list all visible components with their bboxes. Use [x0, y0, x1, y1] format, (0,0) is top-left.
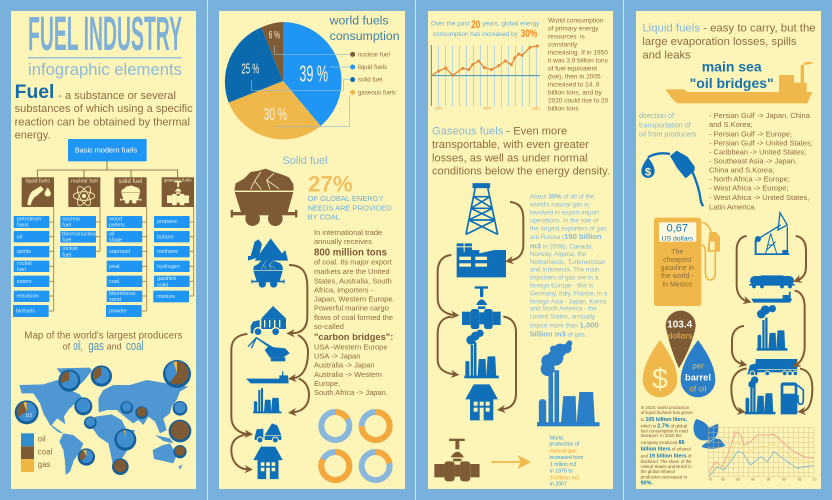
card: cheapest gasoline: 0,67 [667, 223, 688, 235]
panel: energy growth and gaseous fuels [428, 11, 613, 489]
oil routes list: - West Africa -> Europe; [709, 184, 789, 193]
oil flow arrows [731, 236, 812, 411]
list: gaseous fuels: methane [157, 249, 178, 255]
line chart: energy consumption: 1995 [435, 107, 442, 111]
category: liquid fuels: liquid fuels [25, 178, 50, 184]
text: FUEL INDUSTRY [28, 8, 182, 61]
oil routes list: - Caribbean -> United States; [709, 147, 806, 156]
natural gas production text: natural gas [549, 449, 577, 455]
natural gas trade text: involved in export-import [530, 210, 599, 217]
icon: tanker [751, 292, 792, 303]
gaps between panels [208, 0, 624, 500]
natural gas trade text: m3 in 2008), Canada, [530, 242, 593, 251]
line chart: biofuel production: '00 [782, 477, 786, 481]
icon: blue barrel drop [681, 340, 715, 397]
price label [667, 320, 693, 341]
icon: house [465, 384, 498, 420]
natural gas trade text: foreign Europe - this is [530, 282, 593, 289]
oil routes list: Latin America. [709, 202, 756, 211]
card: cheapest gasoline [654, 218, 720, 306]
world consumption text: increasing. If in 1950 [548, 50, 608, 57]
world consumption text: of primary energy [548, 26, 599, 33]
price label: 103.4 [667, 320, 693, 331]
coal trade text: annually receives [314, 237, 372, 246]
liquid fuels heading: Liquid fuels - easy to carry, but the [642, 22, 816, 34]
list: solid fuels: shale [109, 238, 122, 244]
biofuels text: biodiesel. The share of the [641, 459, 692, 464]
coal trade text: Australia -> Japan [314, 361, 375, 370]
map heading: Map of the world's largest producers [24, 330, 182, 341]
icon: gas pump [781, 382, 803, 414]
fuel definition text: - a substance or several [58, 90, 176, 102]
oil supply chain icons [749, 213, 795, 351]
world consumption text: it was 3.9 billion tons [548, 58, 609, 65]
oil routes list: - Persian Gulf -> Europe; [709, 129, 792, 138]
natural gas trade text: Norway, Algeria, the [530, 251, 587, 258]
natural gas trade text: are Russia (190 billion [530, 232, 602, 241]
natural gas trade text: and North America - the [530, 306, 597, 313]
line chart: biofuel production: '70 [708, 477, 712, 481]
world consumption text: World consumption [548, 18, 604, 25]
chart heading [431, 19, 540, 40]
biofuels text: transport. In 2010 the [641, 433, 682, 438]
panel: fuel overview [11, 8, 196, 489]
category: gaseous fuels [162, 177, 194, 207]
list: liquid fuels: emulsion [17, 294, 39, 300]
list: liquid fuels: rocket [17, 261, 32, 267]
list: solid fuels: pellets [109, 223, 125, 229]
world consumption text: 2020 could rise to 20 [548, 98, 609, 105]
list: nuclear fuels: rocket [62, 246, 78, 252]
natural gas trade text: and Indonesia. The main [530, 267, 600, 274]
coal trade text: flows of coal formed the [314, 313, 393, 322]
category: gaseous fuels: gaseous fuels [164, 178, 192, 183]
direction label [639, 112, 697, 138]
line chart: energy consumption: 2015 [532, 107, 540, 111]
coal trade text: States, Australia, South [314, 276, 392, 285]
list: nuclear fuels: fuel [62, 252, 71, 258]
direction label: oil from producers [639, 130, 697, 138]
coal trade text: Powerful marine cargo [314, 304, 389, 313]
producer bubbles: 112 [25, 413, 33, 418]
panel 4 background [636, 11, 821, 489]
fuel definition text: energy. [15, 130, 50, 142]
coal statistic: BY COAL [308, 212, 340, 221]
icon: large power plant [537, 340, 600, 426]
oil routes list: - North Africa -> Europe; [709, 174, 790, 183]
icon: tank wagon [749, 275, 795, 288]
liquid fuels heading: and leaks [642, 50, 691, 62]
root box: Basic modern fuels [75, 145, 137, 154]
price label: dollars [668, 331, 692, 341]
natural gas production text: World [549, 435, 563, 441]
world consumption text: (toe), then in 2005 [548, 74, 601, 81]
gaseous fuels heading [432, 125, 610, 178]
coal statistic: NEEDS ARE PROVIDED [308, 203, 392, 212]
map heading: oil, [73, 339, 83, 353]
icon: pipeline valve [462, 286, 501, 329]
icon: pumpjack [755, 213, 789, 255]
natural gas trade text: foreign Asia - Japan, Korea [530, 298, 607, 305]
map legend: coal [38, 448, 53, 457]
panel: liquid fuels [636, 11, 821, 489]
icon: house [253, 447, 283, 479]
world consumption text [548, 18, 609, 113]
world consumption text: increased to 14, 8 [548, 82, 600, 89]
map legend: oil [38, 435, 46, 444]
coal trade text: USA -Western Europe [314, 342, 387, 351]
root box [68, 139, 147, 161]
icon: yellow dollar drop: $ [652, 363, 668, 395]
world consumption text: billion tons [548, 106, 579, 113]
fuel definition text: Fuel [15, 82, 54, 103]
pie legend: solid fuel [358, 76, 382, 83]
list: solid fuels: sapropel [109, 249, 130, 255]
biofuels text: of liquid biofuels has grown [641, 410, 693, 415]
pie legend: nuclear fuel [358, 51, 390, 58]
oil bridges heading: main sea [702, 59, 762, 75]
list: liquid fuels [13, 216, 49, 317]
list: solid fuels: bituminous [109, 291, 136, 297]
oil bridges heading [690, 59, 774, 91]
biofuels text: In 2010, world production [641, 405, 690, 410]
oil price drops [643, 311, 715, 397]
icon: mine [248, 238, 288, 261]
natural gas production text: 3 trillion m3 [550, 475, 579, 481]
map heading: of [63, 341, 71, 351]
line chart: biofuel production: '80 [721, 477, 725, 481]
pie legend: gaseous fuels [358, 89, 396, 96]
chart heading: consumption has increased by [433, 31, 518, 38]
map heading [24, 330, 182, 353]
pie chart: world fuels consumption: 6 % [269, 30, 280, 42]
icon: gas derrick [466, 184, 498, 234]
liquid fuels heading [642, 22, 816, 62]
world consumption text: of fuel equivalent [548, 66, 597, 73]
category: nuclear fuel [68, 177, 100, 207]
natural gas production text: in 1970 to [550, 468, 573, 474]
line chart: biofuel production: '10 [812, 477, 817, 481]
coal trade text: In international trade [314, 228, 382, 237]
list: liquid fuels: spirits [17, 249, 31, 255]
natural gas production text: production of [549, 442, 580, 448]
chart title: consumption [330, 29, 400, 43]
chart heading: years, global energy [482, 21, 540, 28]
card: cheapest gasoline: the world - [661, 273, 694, 280]
panel 1 background [11, 11, 196, 489]
biofuels text: to 105 billion liters, [641, 417, 688, 423]
gas flow arrows [438, 202, 523, 409]
map heading: gas [88, 339, 104, 353]
coal flow arrows [231, 265, 309, 469]
chart heading: 20 [471, 19, 480, 31]
map heading: coal [126, 339, 144, 353]
category: solid fuel [114, 177, 147, 207]
coal statistic [308, 172, 392, 221]
fuel definition text: substances of which using a specific [15, 103, 193, 115]
list: liquid fuels: biofuels [16, 309, 35, 315]
coal statistic: 27% [308, 172, 353, 197]
fuel definition text: reaction can be obtained by thermal [15, 116, 190, 128]
direction label: transportation of [639, 121, 691, 129]
panel 2 background [219, 11, 405, 489]
heading: solid fuel: Solid fuel [282, 155, 328, 167]
liquid fuels heading: large evaporation losses, spills [642, 36, 797, 48]
biofuels text: billion liters of ethanol [641, 447, 691, 453]
oil routes list: - Southeast Asia -> Japan, [709, 157, 797, 166]
biofuels text: and 19 billion liters of [641, 453, 692, 459]
coal statistic: OF GLOBAL ENERGY [308, 194, 384, 203]
coal trade text: Australia -> Western [314, 370, 382, 379]
natural gas trade text: operations. In the role of [530, 217, 598, 224]
line chart: energy consumption: 2004 [483, 107, 491, 111]
line chart: biofuel production: '85 [736, 477, 740, 481]
oil routes list: - West Africa -> United States, [709, 193, 809, 202]
line chart: biofuel production: '95 [766, 477, 771, 481]
list: gaseous fuels: hydrogen [157, 264, 180, 270]
icon: factory [745, 376, 775, 414]
biofuels text: United States and Brazil in [641, 464, 692, 469]
oil bridges heading: "oil bridges" [690, 75, 774, 91]
coal trade text: Africa, importers - [314, 285, 374, 294]
biofuels text: the global ethanol [641, 469, 675, 474]
coal trade text [314, 228, 395, 397]
list: nuclear fuels: fuel [62, 238, 71, 244]
coal trade text: Japan, Western Europe. [314, 295, 395, 304]
line chart: biofuel production: '05 [797, 477, 802, 481]
biofuels text [641, 405, 693, 487]
icon: coal cart [231, 169, 297, 226]
delivery icons [745, 359, 803, 414]
world map [15, 360, 191, 475]
list: gaseous fuels: mixture [157, 294, 175, 300]
list: solid fuels: peat [109, 264, 120, 270]
natural gas trade text: United States, annually [530, 314, 596, 321]
gaseous fuels heading: transportable, with even greater [432, 139, 589, 151]
natural gas trade text: importers of gas are in a [530, 275, 599, 282]
list: nuclear fuels [60, 216, 97, 258]
pie chart: world fuels consumption: 30 % [264, 104, 287, 124]
gaseous fuels heading: losses, as well as under normal [432, 152, 588, 164]
world consumption text: constantly [548, 42, 578, 49]
icon: power plant with smoke [464, 330, 499, 378]
gas supply chain icons [457, 184, 506, 420]
list: gaseous fuels: solid [157, 282, 168, 288]
category: liquid fuels [22, 177, 54, 207]
natural gas trade text: About 30% of all of the [530, 194, 595, 201]
list: solid fuels: coal [109, 279, 119, 285]
coal trade text: Europe, [314, 379, 340, 388]
icon: power plant [253, 388, 282, 413]
natural gas trade text [529, 194, 608, 339]
coal trade text: markets are the United [314, 267, 390, 276]
list: liquid fuels: petroleum [17, 216, 42, 222]
coal trade text: USA -> Japan [314, 352, 360, 361]
pie chart: world fuels consumption: 25 % [241, 61, 259, 77]
producer bubbles [15, 360, 191, 475]
coal trade text: so-called [314, 322, 344, 331]
coal trade text: of coal. Its major export [314, 258, 393, 267]
list: liquid fuels: fuels [17, 223, 29, 229]
coal supply chain icons [246, 238, 290, 479]
list: gaseous fuels: propane [157, 219, 177, 225]
natural gas production text: in 2007 [550, 482, 567, 488]
pie legend [350, 51, 396, 96]
icon: refinery [757, 305, 787, 351]
icon: gas plant [457, 243, 506, 277]
icon: fuel truck [747, 359, 798, 376]
card: cheapest gasoline: US dollars [662, 236, 694, 243]
category: solid fuel: solid fuel [119, 179, 142, 185]
icon: fuel nozzle and dollar drop: $ [645, 166, 652, 178]
panel 3 background [428, 11, 613, 489]
natural gas production text [549, 435, 583, 488]
list: nuclear fuels: fuel [62, 223, 71, 229]
map legend [21, 433, 53, 472]
map heading: and [107, 341, 122, 351]
icon: blue barrel drop: barrel [685, 373, 711, 383]
biofuels text: which is 2.7% of global [641, 423, 687, 429]
list: gaseous fuels [153, 216, 190, 302]
biofuels text: production decreased to [641, 474, 688, 479]
icon: fuel nozzle and dollar drop [641, 151, 703, 206]
list: gaseous fuels: gasified [157, 276, 176, 282]
icon: truck [255, 423, 281, 443]
subtitle: infographic elements [28, 61, 182, 79]
list: liquid fuels: esters [17, 279, 32, 285]
chart heading: Over the past [431, 21, 470, 28]
pie chart: world fuels consumption [225, 22, 350, 139]
icon: excavator [248, 338, 290, 361]
pie chart: world fuels consumption: 39 % [299, 61, 328, 87]
list: nuclear fuels: nuclear [62, 216, 80, 222]
chart title: world fuels [329, 13, 389, 27]
chart title [329, 13, 400, 43]
list: nuclear fuels: thermonuclear [62, 232, 97, 238]
card: cheapest gasoline: cheapest [663, 257, 692, 264]
icon: leaves [693, 419, 726, 449]
pie legend: liquid fuels [358, 64, 387, 71]
list: solid fuels: oil [109, 232, 114, 238]
oil routes list: and S.Korea; [709, 120, 753, 129]
fuel definition text [15, 82, 193, 142]
natural gas trade text: billion m3 of gas. [530, 330, 587, 339]
coal trade text: 800 million tons [314, 248, 387, 259]
oil routes list: - Persian Gulf -> United States; [709, 138, 813, 147]
biofuels text: company produced 86 [641, 440, 685, 446]
natural gas trade text: Germany, Italy, France, in a [530, 290, 608, 297]
oil routes list: - Persian Gulf -> Japan, China [709, 111, 811, 120]
list: solid fuels: powder [109, 308, 127, 314]
list: solid fuels [106, 216, 142, 317]
coal trade text: "carbon bridges": [314, 332, 393, 342]
icon: brown valve [434, 439, 480, 481]
world consumption text: resources is [548, 34, 586, 41]
natural gas trade text: import more than 1,000 [530, 321, 599, 330]
line chart: biofuel production: '90 [751, 477, 755, 481]
icon: blue coal cart [251, 259, 285, 288]
natural gas trade text: Netherlands, Turkmenistan [530, 259, 606, 266]
icon: dump truck [251, 306, 286, 336]
natural gas production text: increased from [549, 455, 583, 461]
list: liquid fuels: oil [17, 234, 22, 240]
arrow: production [491, 455, 531, 469]
list: liquid fuels: fuel [17, 267, 26, 273]
biofuels text: fuel consumption in road [641, 428, 688, 433]
icon: blue barrel drop: per [692, 361, 704, 370]
oil routes list: China and S.Korea; [709, 166, 774, 175]
donut charts [321, 412, 390, 480]
card: cheapest gasoline: gasoline in [661, 265, 694, 272]
natural gas trade text: the largest exporters of gas [530, 225, 607, 232]
gaseous fuels heading: Gaseous fuels - Even more [432, 125, 567, 137]
icon: blue barrel drop: of oil [690, 385, 707, 394]
natural gas trade text: world's natural gas is [529, 202, 589, 209]
chart heading: 30% [521, 28, 537, 40]
fuel tree diagram [13, 139, 194, 317]
icon: cargo ship [246, 371, 289, 383]
line chart: biofuel production [708, 427, 817, 481]
direction label: direction of [639, 112, 674, 120]
panel: world consumption and solid fuel [219, 11, 405, 489]
list: solid fuels: sand [109, 297, 121, 303]
world consumption text: billion tons, and by [548, 90, 602, 97]
coal trade text: South Africa -> Japan. [314, 388, 388, 397]
card: cheapest gasoline: The [671, 249, 683, 256]
list: gaseous fuels: butane [157, 235, 174, 241]
card: cheapest gasoline: in Mexico [663, 281, 692, 288]
oil routes list [709, 111, 813, 211]
icon: brown drop [666, 311, 696, 368]
icon: tanker ship [666, 62, 814, 103]
line chart: energy consumption [431, 44, 540, 111]
biofuels text: 90%. [641, 481, 653, 487]
category: nuclear fuel: nuclear fuel [71, 178, 98, 184]
map legend: gas [38, 460, 51, 469]
list: solid fuels: wood [108, 216, 122, 222]
natural gas production text: 1 trillion m3 [550, 462, 576, 468]
gaseous fuels heading: conditions below the energy density. [432, 166, 610, 178]
